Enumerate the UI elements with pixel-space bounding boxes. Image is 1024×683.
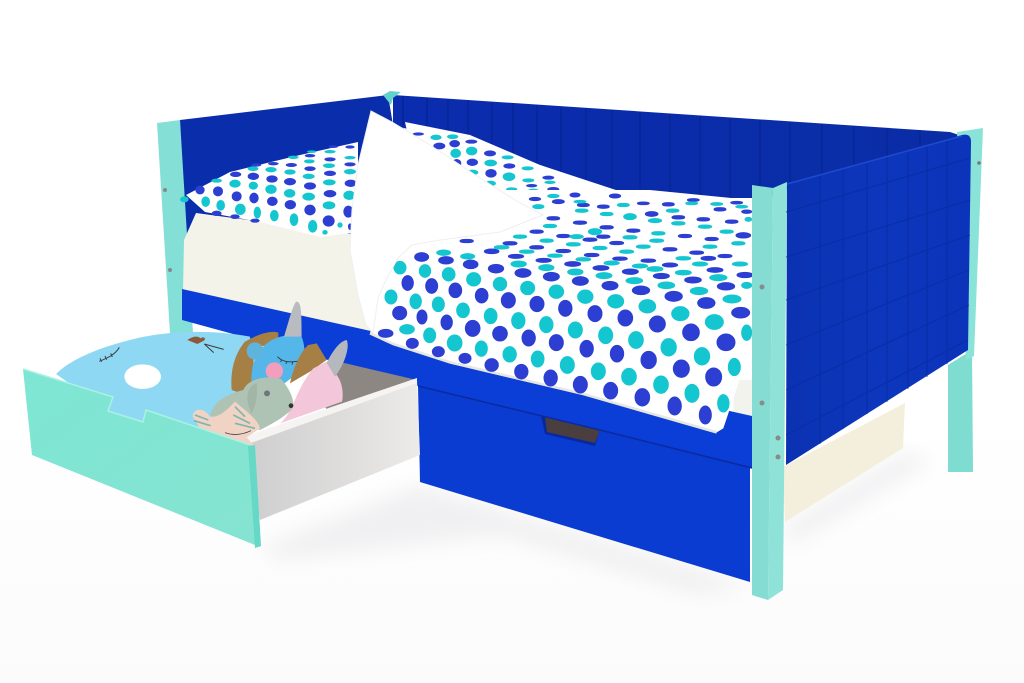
blue bed rail (182, 289, 752, 468)
drawer interior shadow (315, 362, 417, 415)
toy: blue cat pillow (56, 332, 250, 438)
panel: back upholstered headboard (393, 95, 962, 205)
panel: left upholstered side (180, 95, 393, 300)
toys group (193, 302, 348, 447)
drawer teal front (23, 369, 261, 548)
toy: blue unicorn (231, 302, 305, 397)
toy: grey plush elephant (210, 362, 293, 430)
right front post (752, 182, 787, 600)
corner post top (383, 91, 401, 105)
blanket: polka dot duvet (370, 190, 753, 432)
floor shadows (260, 452, 930, 595)
mattress (183, 213, 752, 417)
drawer handle (541, 416, 600, 446)
toy: striped pillow (193, 402, 260, 447)
back right teal post (948, 128, 983, 472)
toy: pink unicorn (280, 340, 348, 423)
cream drawer behind (783, 403, 905, 522)
drawer white side (247, 380, 420, 520)
blanket: white folded corner (350, 111, 543, 333)
open drawer with toys (23, 302, 420, 548)
pillow: left polka dot (180, 142, 358, 237)
pillow: back polka dot (405, 122, 752, 240)
panel: right quilted upholstered side (786, 135, 971, 465)
left teal post (157, 120, 193, 333)
blue closed drawer (418, 386, 750, 582)
